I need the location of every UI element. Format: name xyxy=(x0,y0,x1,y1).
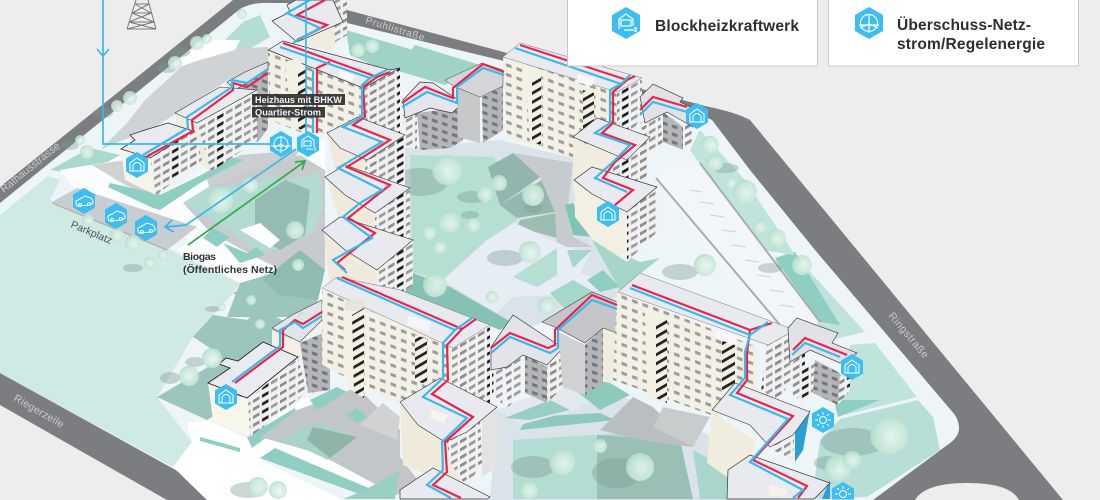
grid electricity line with arrow xyxy=(97,0,272,144)
legend: Blockheizkraftwerk: Blockheizkraftwerk xyxy=(655,18,799,35)
building: south-east block 1 xyxy=(707,383,810,477)
building: central stepped block 3 xyxy=(322,217,413,310)
building: east wing with grey roof xyxy=(788,318,857,405)
legend: Überschuss-Netzstrom: Überschuss-Netz- xyxy=(897,17,1031,34)
label: Biogas: Biogas xyxy=(183,251,216,263)
quarter electricity line xyxy=(305,0,307,135)
label: Parkplatz: Parkplatz xyxy=(69,219,114,247)
icon: power pylon xyxy=(127,0,156,29)
icon: north-east house hex xyxy=(686,103,708,129)
building: north-east wing xyxy=(640,84,707,153)
district heating pipes (blue) xyxy=(143,0,840,498)
building: main central slab xyxy=(322,277,490,430)
label: Quartier-Strom: Quartier-Strom xyxy=(255,108,321,118)
arrow: biogas supply xyxy=(188,161,305,245)
long parking strip xyxy=(655,163,820,332)
icon: solar hex 1 xyxy=(812,407,834,433)
icon: CHP hex xyxy=(297,131,319,157)
right lawn xyxy=(770,250,865,340)
arrow: electricity to car park xyxy=(165,149,296,232)
building: central stepped block 1 xyxy=(327,117,405,212)
building: south edge roof xyxy=(400,468,490,499)
building: western connector xyxy=(227,62,268,142)
building: tall north slab xyxy=(268,41,400,135)
icon: solar hex 2 xyxy=(832,482,854,500)
building: tall north-east slab xyxy=(503,43,642,158)
building: west end block xyxy=(121,123,202,195)
icon: west house hex xyxy=(126,152,148,178)
upper-left strip along road xyxy=(100,15,270,150)
upper central garden xyxy=(403,140,640,330)
building: south-east block 2 xyxy=(727,455,830,499)
label: Pruhlistraße: Pruhlistraße xyxy=(364,15,426,44)
legend: Blockheizkraftwerk xyxy=(568,0,818,66)
legend: Überschuss-Netzstrom xyxy=(828,0,1078,66)
label: Biogas xyxy=(183,251,277,276)
label: Riegerzeile: Riegerzeile xyxy=(12,392,66,431)
building: low south-west connector xyxy=(272,300,330,393)
building: far north block xyxy=(272,0,347,50)
car park xyxy=(52,188,197,250)
label: Ringstraße: Ringstraße xyxy=(886,310,931,361)
building: east stepped block 2 xyxy=(574,167,657,262)
icon: south-west house hex xyxy=(215,384,237,410)
building: central stepped block 2 xyxy=(325,165,410,265)
south white lawn xyxy=(173,397,377,500)
west lawn pale xyxy=(0,176,240,467)
tree shadows xyxy=(61,47,885,498)
legend: Überschuss-Netzstrom: strom/Regelenergie xyxy=(897,36,1045,53)
icon: east wing house hex xyxy=(841,354,863,380)
building: western middle block xyxy=(175,87,257,172)
building: south-west end block xyxy=(208,342,307,437)
round plaza cut-out xyxy=(915,483,1019,500)
building: south central block xyxy=(400,378,497,497)
icon: east block house hex xyxy=(597,201,619,227)
building: low central block xyxy=(491,315,563,407)
trees xyxy=(75,9,908,499)
label: Biogas: (Öffentliches Netz) xyxy=(183,263,277,276)
lower central garden xyxy=(490,385,760,500)
icon: wind turbine hex xyxy=(270,131,292,157)
building: grey-roof central block xyxy=(542,292,618,395)
zone between west blocks and central column xyxy=(60,140,325,300)
icon: car hex 1 xyxy=(73,188,95,214)
label: Rathausstrasse: Rathausstrasse xyxy=(0,140,63,195)
building: northern L-shape block xyxy=(403,63,503,150)
label: Heizhaus mit BHKW: Heizhaus mit BHKW xyxy=(255,95,343,105)
district heating pipes (red) xyxy=(146,0,847,498)
icon: car hex 2 xyxy=(105,203,127,229)
upper-right teal strip xyxy=(346,30,430,75)
building: east central slab xyxy=(613,273,795,417)
icon: car hex 3 xyxy=(135,215,157,241)
building: east stepped block 1 xyxy=(573,118,650,197)
